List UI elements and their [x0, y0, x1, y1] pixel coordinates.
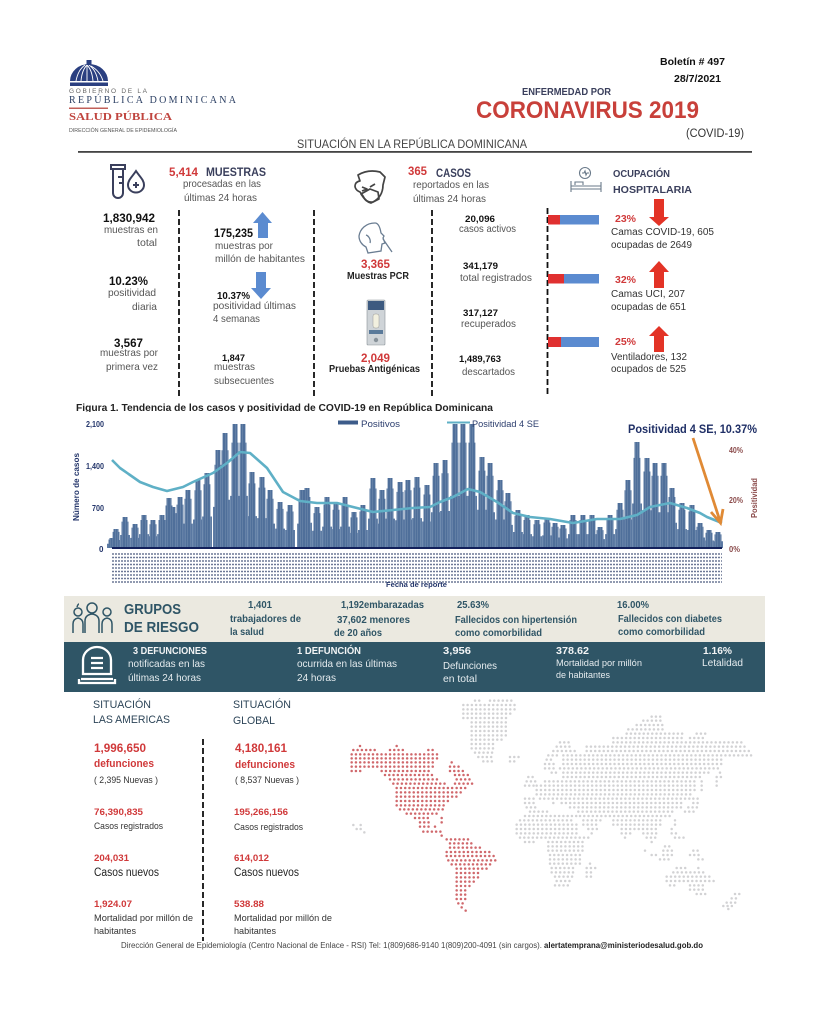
stat: casos registrados global: 195,266,156 [234, 807, 288, 818]
panel: defunciones [64, 642, 765, 692]
stat: muestras en total: total [137, 237, 157, 249]
heading: grupos de riesgo [124, 601, 199, 636]
stat: camas UCI: ocupadas de 651 [611, 302, 686, 313]
stat: defuncion ocurrida: ocurrida en las últimas [297, 658, 397, 670]
stat: defunciones 24 horas: últimas 24 horas [128, 672, 201, 684]
left axis: 1,400 [86, 462, 104, 471]
stat: casos activos: 20,096 [465, 214, 495, 225]
stat: camas covid: Camas COVID-19, 605 [611, 227, 714, 238]
stat: pruebas antigenicas: Pruebas Antigénicas [329, 364, 420, 375]
map: dotted world map [352, 701, 752, 911]
icon: dome [70, 60, 108, 86]
stat: muestras PCR: Muestras PCR [347, 271, 410, 282]
stat: defunciones 24 horas: notificadas en las [128, 658, 205, 670]
stat: positividad diaria [108, 276, 157, 313]
stat: letalidad: 1.16% [703, 645, 733, 657]
left axis [71, 420, 104, 554]
stat: muestras por primera vez: primera vez [106, 361, 158, 373]
stat: mortalidad americas: 1,924.07 [94, 899, 132, 910]
stat: recuperados: recuperados [461, 318, 516, 330]
stat: mortalidad global: 538.88 [234, 899, 264, 910]
icon: tombstone [79, 647, 115, 683]
stat: pruebas antigenicas: 2,049 [361, 351, 390, 365]
left axis: 0 [99, 545, 104, 554]
right axis: 0% [729, 545, 740, 554]
logo: Gobierno de la República Dominicana, Salud Pública: SALUD PÚBLICA [69, 111, 172, 123]
icon: people [73, 603, 112, 633]
title [476, 86, 744, 140]
stat: recuperados [461, 308, 516, 330]
stat: casos registrados americas: Casos registrados [94, 821, 163, 832]
panel: ocupacion hospitalaria [548, 167, 714, 396]
stat: embarazadas y menores: embarazadas [364, 599, 424, 611]
stat: mortalidad americas: habitantes [94, 926, 136, 937]
x axis title: Fecha de reporte [386, 580, 447, 589]
logo: Gobierno de la República Dominicana, Salud Pública: REPÚBLICA DOMINICANA [69, 94, 237, 106]
heading: casos [408, 166, 489, 205]
stat: mortalidad global [234, 899, 332, 937]
title: ENFERMEDAD POR [522, 86, 611, 98]
stat: casos registrados americas: 76,390,835 [94, 807, 144, 818]
right axis: Positividad [750, 478, 759, 518]
stat: hipertension [455, 599, 577, 639]
stat: casos registrados global: Casos registrados [234, 822, 303, 833]
stat: positividad diaria: 10.23% [109, 276, 148, 288]
stat: casos activos [459, 214, 516, 235]
stat: camas covid: 23% [615, 213, 637, 225]
stat: mortalidad: 378.62 [556, 645, 589, 657]
stat: mortalidad global: Mortalidad por millón de [234, 913, 332, 924]
stat: mortalidad: Mortalidad por millón [556, 658, 642, 669]
panel: situacion las americas [93, 698, 193, 937]
stat: muestras por millon [214, 228, 305, 265]
heading: muestras [169, 167, 266, 204]
stat: positividad ultimas 4 semanas [213, 290, 296, 325]
stat: muestras PCR: 3,365 [361, 257, 390, 271]
chart: tendencia de casos y positividad [70, 402, 759, 589]
stat: hipertension: Fallecidos con hipertensión [455, 614, 577, 626]
stat: muestras por primera vez [100, 338, 158, 373]
stat: mortalidad global: habitantes [234, 926, 276, 937]
stat: defunciones americas: defunciones [94, 758, 154, 770]
stat: muestras en total [103, 213, 158, 249]
arrow: up blue [253, 212, 272, 238]
heading: global [233, 698, 291, 727]
stat: trabajadores de la salud: 1,401 [248, 599, 272, 611]
stat: positividad diaria: positividad [108, 287, 156, 299]
bar: ventiladores [548, 337, 599, 347]
stat: positividad ultimas 4 semanas: positividad últimas [213, 300, 296, 312]
stat: total registrados [460, 261, 532, 284]
stat: defunciones americas: 1,996,650 [94, 743, 146, 755]
heading: casos: reportados en las [413, 179, 489, 191]
stat: embarazadas y menores: 1,192 [341, 599, 364, 611]
bulletin number and date: 28/7/2021 [674, 74, 721, 85]
heading: las americas [93, 698, 170, 726]
stat: total registrados: 341,179 [463, 261, 498, 272]
stat: camas covid: ocupadas de 2649 [611, 240, 692, 251]
right axis [729, 446, 759, 554]
stat: defunciones en total: Defunciones [443, 660, 497, 672]
stat: casos registrados global [234, 807, 303, 833]
stat: recuperados: 317,127 [463, 308, 498, 319]
stat: ventiladores [611, 336, 687, 375]
stat: diabetes: 16.00% [617, 599, 650, 611]
stat: defunciones global: ( 8,537 Nuevas ) [235, 775, 299, 786]
callout: Positividad 4 SE, 10.37% [628, 422, 757, 436]
section heading: SITUACIÓN EN LA REPÚBLICA DOMINICANA [297, 138, 527, 151]
title: CORONAVIRUS 2019 [476, 97, 699, 124]
panel: situacion global [233, 698, 332, 937]
stat: casos nuevos global: Casos nuevos [234, 867, 299, 879]
stat: muestras subsecuentes [214, 353, 274, 387]
x axis date labels [112, 554, 722, 582]
panel: grupos de riesgo [64, 596, 765, 642]
stat: defunciones global: 4,180,161 [235, 743, 288, 755]
stat: mortalidad americas [94, 899, 193, 937]
stat: positividad ultimas 4 semanas: 4 semanas [213, 313, 260, 325]
stat: muestras subsecuentes: muestras [214, 361, 255, 373]
stat: defunciones global: defunciones [235, 759, 295, 771]
legend: Positivos [361, 419, 400, 430]
stat: diabetes: como comorbilidad [618, 626, 705, 638]
stat: defunciones en total [443, 645, 497, 685]
stat: letalidad: Letalidad [702, 657, 743, 669]
stat: embarazadas y menores [334, 599, 424, 639]
heading: muestras: procesadas en las [183, 178, 261, 190]
stat: trabajadores de la salud: la salud [230, 626, 264, 638]
stat: trabajadores de la salud [230, 599, 301, 638]
heading: ocupacion: HOSPITALARIA [613, 184, 692, 196]
heading: las americas: SITUACIÓN [93, 698, 151, 711]
left axis: 700 [92, 504, 104, 513]
left axis: Número de casos [71, 453, 81, 521]
icon: nasal swab [359, 223, 392, 253]
stat: diabetes: Fallecidos con diabetes [618, 613, 722, 625]
stat: defunciones 24 horas: 3 DEFUNCIONES [133, 645, 207, 657]
map region: the Americas [352, 746, 495, 911]
stat: casos nuevos americas: Casos nuevos [94, 867, 159, 879]
stat: defuncion ocurrida: 24 horas [297, 672, 336, 684]
heading: ocupacion [613, 167, 692, 196]
stat: hipertension: 25.63% [457, 599, 490, 611]
right axis: 40% [729, 446, 743, 455]
title: (COVID-19) [686, 128, 744, 140]
stat: defuncion ocurrida: 1 DEFUNCIÓN [297, 644, 361, 657]
logo: Gobierno de la República Dominicana, Salud Pública [69, 60, 237, 134]
stat: defunciones en total: en total [443, 673, 477, 685]
bars: positivos [110, 424, 722, 549]
stat: camas UCI: 32% [615, 274, 637, 286]
icon: face with mask [355, 171, 385, 203]
stat: muestras subsecuentes: 1,847 [222, 353, 245, 364]
stat: mortalidad [556, 645, 642, 681]
stat: defunciones en total: 3,956 [443, 645, 471, 657]
stat: ventiladores: Ventiladores, 132 [611, 352, 687, 363]
heading: casos: CASOS [436, 168, 471, 180]
stat: defuncion ocurrida [297, 644, 397, 684]
stat: muestras por primera vez: muestras por [100, 347, 158, 359]
stat: defunciones global [235, 743, 299, 786]
stat: muestras por millon: millón de habitantes [215, 253, 305, 265]
arrow: orange [693, 438, 723, 523]
stat: positividad diaria: diaria [132, 301, 157, 313]
heading: grupos de riesgo: DE RIESGO [124, 619, 199, 636]
heading: global: SITUACIÓN [233, 698, 291, 711]
stat: defunciones 24 horas [128, 645, 207, 684]
heading: ocupacion: OCUPACIÓN [613, 167, 670, 180]
stat: descartados: 1,489,763 [459, 354, 501, 365]
icon: antigen test cassette [367, 300, 385, 345]
heading: global: GLOBAL [233, 715, 275, 727]
stat: defunciones americas: ( 2,395 Nuevas ) [94, 775, 158, 786]
arrow: up red [649, 261, 669, 288]
stat: positividad ultimas 4 semanas: 10.37% [217, 290, 251, 302]
heading: las americas: LAS AMERICAS [93, 714, 170, 726]
stat: camas UCI [611, 274, 686, 313]
stat: casos registrados americas [94, 807, 163, 832]
arrow: down red [649, 199, 669, 226]
stat: muestras por millon: 175,235 [214, 228, 254, 240]
stat: muestras por millon: muestras por [215, 240, 273, 252]
stat: camas UCI: Camas UCI, 207 [611, 289, 685, 300]
panel: casos [329, 166, 532, 396]
stat: casos nuevos americas: 204,031 [94, 853, 130, 864]
stat: letalidad [702, 645, 743, 669]
stat: embarazadas y menores: 37,602 menores [337, 614, 410, 626]
right axis: 20% [729, 496, 743, 505]
panel: muestras [100, 165, 314, 396]
left axis: 2,100 [86, 420, 104, 429]
stat: muestras en total: muestras en [104, 224, 158, 236]
heading: casos: 365 [408, 166, 428, 178]
chart title: Figura 1. Tendencia de los casos y positividad de COVID-19 en República Dominicana [76, 402, 493, 414]
map region: rest of the world [353, 701, 752, 909]
heading: muestras: 5,414 [169, 167, 199, 179]
stat: casos nuevos americas [94, 853, 159, 879]
stat: pruebas antigenicas [329, 351, 420, 375]
bar: camas UCI [548, 274, 599, 284]
stat: camas covid [611, 213, 714, 251]
stat: descartados: descartados [462, 366, 515, 378]
stat: casos nuevos global [234, 853, 299, 879]
stat: descartados [459, 354, 515, 378]
stat: total registrados: total registrados [460, 272, 532, 284]
logo: Gobierno de la República Dominicana, Salud Pública: DIRECCIÓN GENERAL DE EPIDEMIOLOGÍA [69, 127, 177, 134]
legend [338, 419, 539, 430]
stat: muestras subsecuentes: subsecuentes [214, 375, 274, 387]
icon: test tube and drop [111, 165, 144, 198]
icon: hospital bed [571, 168, 601, 192]
line: positividad 4 SE [112, 452, 722, 523]
stat: muestras en total: 1,830,942 [103, 213, 155, 225]
heading: grupos de riesgo: GRUPOS [124, 601, 181, 618]
stat: diabetes [617, 599, 722, 638]
stat: mortalidad americas: Mortalidad por millón de [94, 913, 193, 924]
arrow: up red 2 [649, 326, 669, 352]
logo: Gobierno de la República Dominicana, Salud Pública: GOBIERNO DE LA [69, 88, 148, 95]
stat: trabajadores de la salud: trabajadores de [230, 613, 301, 625]
stat: ventiladores: ocupados de 525 [611, 364, 686, 375]
stat: casos activos: casos activos [459, 223, 516, 235]
stat: ventiladores: 25% [615, 336, 637, 348]
bulletin number and date [660, 57, 725, 85]
stat: embarazadas y menores: de 20 años [334, 627, 382, 639]
footer: Dirección General de Epidemiología (Centro Nacional de Enlace - RSI) Tel: 1(809)686-9140 1(809)200-4091 (sin cargos). alertatemprana@ministeriodesalud.gob.do [121, 941, 703, 950]
heading: casos: últimas 24 horas [413, 193, 486, 205]
bulletin number and date: Boletín # 497 [660, 57, 725, 68]
arrow: down blue [251, 272, 271, 299]
stat: muestras PCR [347, 257, 410, 282]
stat: mortalidad: de habitantes [556, 670, 610, 681]
stat: defunciones americas [94, 743, 158, 786]
legend: Positividad 4 SE [472, 419, 539, 430]
stat: muestras por primera vez: 3,567 [114, 338, 143, 350]
heading: muestras: MUESTRAS [206, 167, 266, 179]
bar: camas covid [548, 215, 599, 224]
stat: casos nuevos global: 614,012 [234, 853, 269, 864]
stat: hipertension: como comorbilidad [455, 627, 542, 639]
heading: muestras: últimas 24 horas [184, 192, 257, 204]
